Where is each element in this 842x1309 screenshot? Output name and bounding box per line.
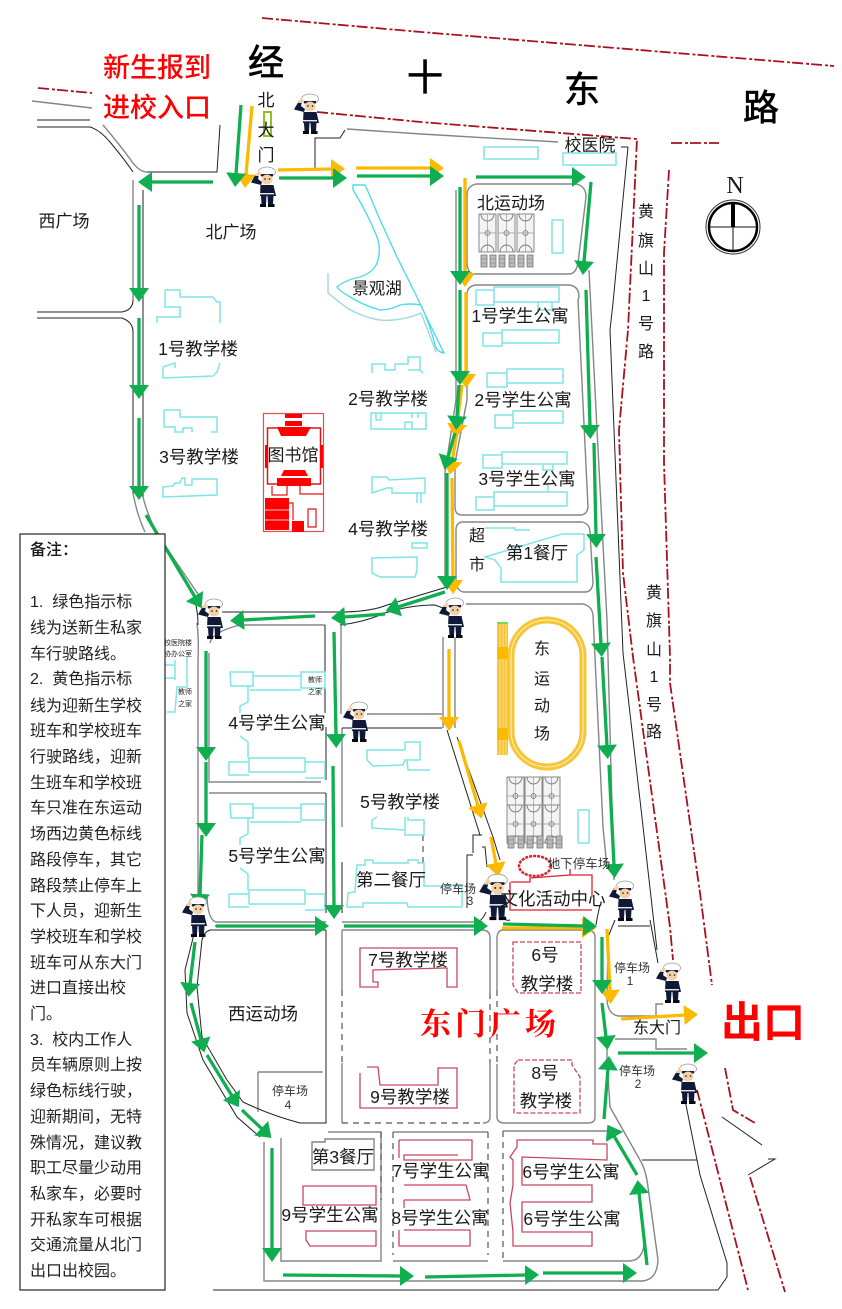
- place labels: 9号学生公寓: [281, 1205, 379, 1225]
- place labels: 7号学生公寓: [392, 1161, 490, 1181]
- exit heading: 出口: [721, 999, 805, 1046]
- place labels: 校医院楼: [164, 638, 192, 647]
- place labels: 停车场: [440, 881, 476, 896]
- notes body: 门。: [30, 1005, 62, 1023]
- notes body: 路段禁止停车上: [30, 877, 142, 895]
- east sports track: [497, 620, 583, 767]
- place labels: 9号教学楼: [370, 1087, 450, 1107]
- notes body: 开私家车可根据: [30, 1211, 142, 1229]
- notes body: 殊情况，建议教: [30, 1134, 142, 1152]
- notes body: 场西边黄色标线: [30, 825, 142, 843]
- place labels: 4号教学楼: [348, 519, 428, 539]
- notes body: 2. 黄色指示标: [30, 670, 132, 688]
- road label: 黄旗山1号路 north: 旗: [638, 232, 654, 250]
- road label: 黄旗山1号路 south: 旗: [646, 612, 662, 630]
- compass: N: [726, 173, 744, 199]
- road name: 经十东路: 路: [743, 87, 779, 128]
- place labels: 4: [285, 1098, 292, 1112]
- traffic officer: [656, 963, 681, 1003]
- campus small cyan rectangles: [484, 147, 616, 843]
- notes body: 线为迎新生学校: [30, 697, 142, 715]
- notes body: 车只准在东运动: [30, 799, 142, 817]
- place labels: 北广场: [206, 223, 256, 242]
- place labels: 2: [635, 1077, 642, 1091]
- red library building plan: [264, 414, 324, 532]
- notes body: 绿色标线行驶，: [30, 1082, 142, 1100]
- green private car route arrows: [139, 105, 695, 1277]
- place labels: 2号学生公寓: [474, 390, 572, 410]
- building: 4号教学楼 outline: [372, 477, 427, 577]
- place labels: 校医院: [564, 136, 616, 155]
- place labels: 5号学生公寓: [228, 846, 326, 866]
- notes body: 3. 校内工作人: [30, 1031, 132, 1049]
- place labels: [38, 136, 681, 1229]
- north gate label: 北: [258, 91, 274, 110]
- place labels: 市: [469, 556, 485, 574]
- place labels: 8号学生公寓: [391, 1208, 489, 1228]
- place labels: 5号教学楼: [360, 792, 440, 812]
- road label: 黄旗山1号路 north: 黄: [638, 203, 654, 221]
- building: 1号教学楼 outline: [157, 290, 220, 378]
- traffic officer: [439, 598, 464, 638]
- notes body: 车行驶路线。: [30, 645, 126, 663]
- place labels: 停车场: [272, 1083, 308, 1098]
- place labels: 之家: [308, 687, 322, 696]
- road name: 经十东路: 东: [564, 69, 600, 110]
- place labels: 之家: [178, 699, 192, 708]
- place labels: 动: [534, 697, 550, 715]
- notes body: 职工尽量少动用: [30, 1159, 142, 1177]
- notes body: 学校班车和学校: [30, 928, 142, 946]
- notes body: 私家车，必要时: [30, 1185, 142, 1203]
- place labels: 西广场: [38, 212, 90, 231]
- east basketball courts: [507, 777, 562, 848]
- building: 3号教学楼 outline: [163, 410, 217, 497]
- building: 2号教学楼 outline: [371, 357, 426, 429]
- road name: 经十东路: 十: [407, 57, 443, 98]
- road label: 黄旗山1号路 north: 1: [642, 288, 651, 305]
- place labels: 2号教学楼: [348, 389, 428, 409]
- place labels: 景观湖: [352, 279, 402, 298]
- place labels: 3号教学楼: [159, 447, 239, 467]
- place labels: 超: [469, 527, 485, 545]
- notes body: 进口直接出校: [30, 979, 126, 997]
- place labels: 4号学生公寓: [228, 713, 326, 733]
- place labels: 教学楼: [521, 974, 573, 994]
- underground car park ring and cultural centre outline: [510, 856, 592, 910]
- notes heading: 备注：: [30, 541, 78, 559]
- building: 第二餐厅 outline: [347, 860, 462, 907]
- place labels: 地下停车场: [548, 856, 610, 871]
- road label: 黄旗山1号路 south: 号: [646, 696, 662, 714]
- small cyan buildings and sports fields: [157, 147, 616, 910]
- road label: 黄旗山1号路 south: 山: [646, 641, 662, 659]
- place labels: 西运动场: [228, 1004, 298, 1024]
- place labels: 停车场: [614, 960, 650, 975]
- place labels: 第3餐厅: [312, 1147, 374, 1167]
- place labels: 1: [627, 974, 634, 988]
- north gate label: 大: [258, 121, 274, 140]
- road label: 黄旗山1号路 north: [638, 203, 654, 361]
- place labels: 1号教学楼: [158, 339, 238, 359]
- place labels: 图书馆: [268, 446, 318, 465]
- place labels: 文化活动中心: [500, 889, 606, 909]
- road label: 黄旗山1号路 south: 路: [646, 723, 662, 741]
- traffic officer: [672, 1064, 697, 1104]
- traffic officer: [609, 881, 634, 921]
- compass: [706, 173, 760, 254]
- road label: 黄旗山1号路 south: 黄: [646, 584, 662, 602]
- building: 第1餐厅 outline: [485, 528, 584, 582]
- place labels: 北运动场: [477, 194, 545, 213]
- notes body: 1. 绿色指示标: [30, 593, 132, 611]
- traffic officer: [343, 702, 368, 742]
- notes body: 迎新期间，无特: [30, 1108, 142, 1126]
- notes body: 班车可从东大门: [30, 954, 142, 972]
- place labels: 停车场: [619, 1063, 655, 1078]
- building: dorm 5 outline: [229, 804, 325, 910]
- entrance heading: 新生报到: [103, 53, 211, 83]
- red teaching buildings and dormitories: [303, 942, 607, 1246]
- road name: 经十东路: [248, 42, 779, 128]
- place labels: 3号学生公寓: [478, 469, 576, 489]
- east gate square heading: 东门广场: [420, 1007, 560, 1042]
- traffic officer: [251, 167, 276, 207]
- north gate marker: [264, 112, 271, 136]
- notes body: 线为送新生私家: [30, 619, 142, 637]
- building: student dorm 1-3 outlines: [476, 287, 567, 510]
- place labels: 7号教学楼: [368, 950, 448, 970]
- road label: 黄旗山1号路 south: 1: [650, 669, 659, 686]
- north gate label: 门: [258, 146, 274, 165]
- road label: 黄旗山1号路 north: 路: [638, 343, 654, 361]
- place labels: 8号: [531, 1063, 559, 1083]
- notes body: 员车辆原则上按: [30, 1056, 142, 1074]
- building: dorm 4 outline: [229, 672, 325, 778]
- entrance heading: 进校入口: [103, 93, 211, 123]
- road name: 经十东路: 经: [248, 42, 284, 83]
- place labels: 1号学生公寓: [471, 306, 569, 326]
- notes body: 路段停车，其它: [30, 851, 142, 869]
- place labels: 6号学生公寓: [522, 1162, 620, 1182]
- lake outline: [328, 185, 444, 353]
- place labels: 6号学生公寓: [523, 1209, 621, 1229]
- place labels: 6号: [531, 945, 559, 965]
- building: 5号教学楼 outline: [367, 742, 430, 835]
- building: 教师之家 outline: [165, 657, 187, 712]
- place labels: 教师: [308, 675, 322, 684]
- place labels: 场: [534, 725, 550, 743]
- notes body: 下人员，迎新生: [30, 902, 142, 920]
- notes body: 出口出校园。: [30, 1262, 126, 1280]
- yellow school bus route arrows: [246, 106, 685, 1019]
- place labels: 东: [534, 640, 550, 658]
- notes body: 生班车和学校班: [30, 774, 142, 792]
- place labels: 运: [534, 670, 550, 688]
- notes body: 交通流量从北门: [30, 1236, 142, 1254]
- traffic officer: [479, 874, 508, 920]
- place labels: 第二餐厅: [356, 870, 426, 890]
- entrance heading: [103, 53, 211, 123]
- traffic officer: [198, 599, 223, 639]
- notes body: 行驶路线，迎新: [30, 748, 142, 766]
- traffic officer: [294, 94, 319, 134]
- place labels: 东大门: [633, 1019, 681, 1037]
- north gate label: [258, 91, 274, 165]
- north basketball courts: [479, 214, 534, 267]
- road label: 黄旗山1号路 north: 山: [638, 260, 654, 278]
- road label: 黄旗山1号路 south: [646, 584, 662, 741]
- notes body: 班车和学校班车: [30, 722, 142, 740]
- place labels: 第1餐厅: [506, 543, 568, 563]
- traffic officer: [182, 897, 207, 937]
- place labels: 教学楼: [520, 1091, 572, 1111]
- road label: 黄旗山1号路 north: 号: [638, 315, 654, 333]
- place labels: 3: [467, 894, 474, 908]
- panel: notes: [20, 534, 165, 1290]
- place labels: 协办公室: [164, 649, 192, 658]
- place labels: 教师: [178, 687, 192, 696]
